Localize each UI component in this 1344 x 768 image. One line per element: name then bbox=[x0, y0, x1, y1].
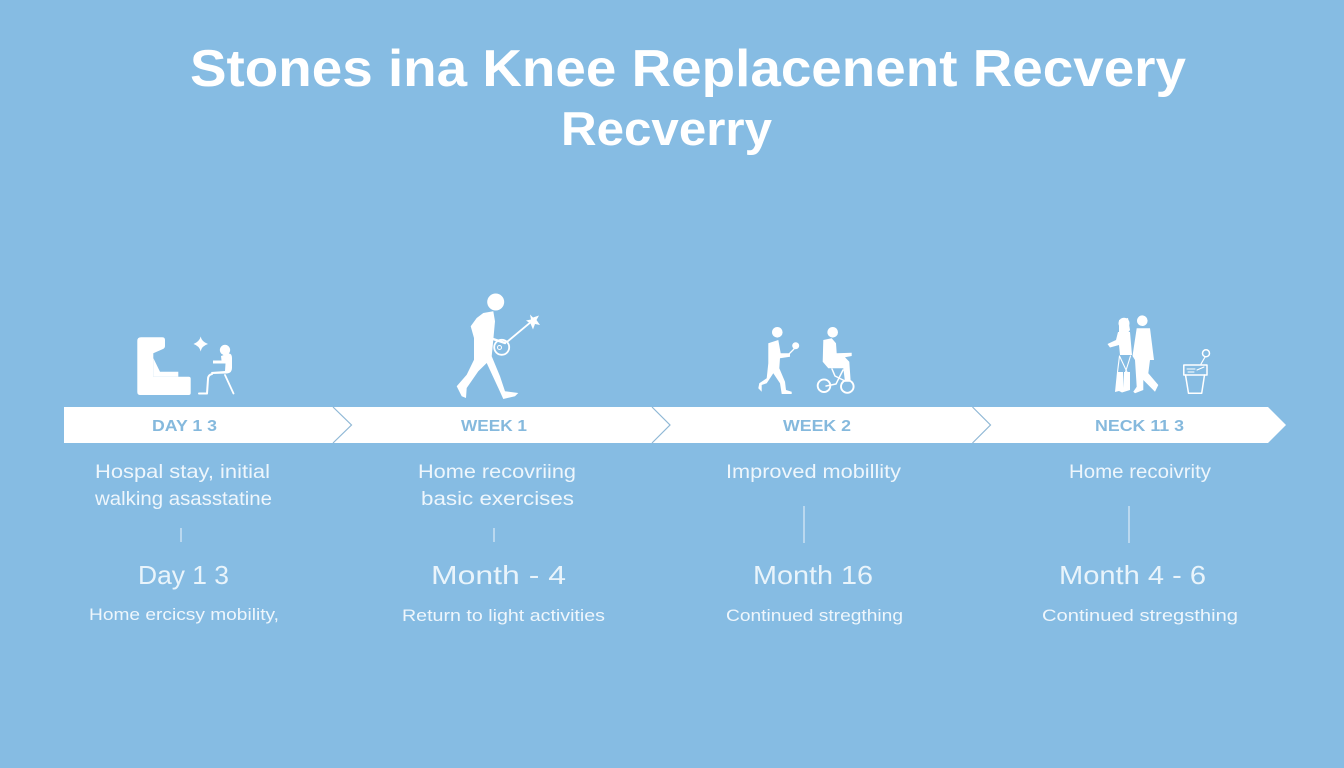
title: Stones ina Knee Replacenent Recvery bbox=[190, 40, 1186, 98]
icon: walking person with key-shaped cane bbox=[457, 294, 540, 399]
column 4 details: Month 4 - 6 bbox=[1059, 560, 1206, 590]
column 3 details: Month 16 bbox=[753, 560, 873, 590]
column 2 details: basic exercises bbox=[421, 489, 574, 510]
title bbox=[190, 40, 1186, 155]
stage label: day 1 3: DAY 1 3 bbox=[152, 418, 217, 435]
icon: patient in hospital chair and seated figure bbox=[137, 336, 234, 395]
column 3 details: Continued stregthing bbox=[726, 606, 903, 625]
timeline arrow bar bbox=[64, 407, 1286, 443]
column 2 details: Month - 4 bbox=[431, 560, 566, 590]
column 4 details: Home recoivrity bbox=[1069, 462, 1212, 483]
column 1 details: Hospal stay, initial bbox=[95, 462, 270, 483]
column 4 details bbox=[1042, 462, 1238, 625]
column 1 details: walking asasstatine bbox=[94, 489, 272, 510]
stage label: week 2: WEEK 2 bbox=[783, 418, 851, 435]
column 1 details bbox=[89, 462, 279, 624]
column 2 details: Home recovriing bbox=[418, 462, 576, 483]
column 2 details: Return to light activities bbox=[402, 606, 605, 625]
icon: couple walking and drink cup bbox=[1108, 315, 1210, 393]
column 2 details bbox=[402, 462, 605, 625]
column 1 details: Day 1 3 bbox=[138, 560, 229, 590]
icon: walking person with ball and person on a bicycle bbox=[758, 327, 854, 394]
column 4 details: Continued stregsthing bbox=[1042, 606, 1238, 625]
title: Recverry bbox=[561, 102, 772, 155]
column 3 details bbox=[726, 462, 903, 625]
column 3 details: Improved mobillity bbox=[726, 462, 902, 483]
column 1 details: Home ercicsy mobility, bbox=[89, 605, 279, 624]
stage label: week 1: WEEK 1 bbox=[461, 418, 527, 435]
stage label: neck 11 3: NECK 11 3 bbox=[1095, 418, 1184, 435]
